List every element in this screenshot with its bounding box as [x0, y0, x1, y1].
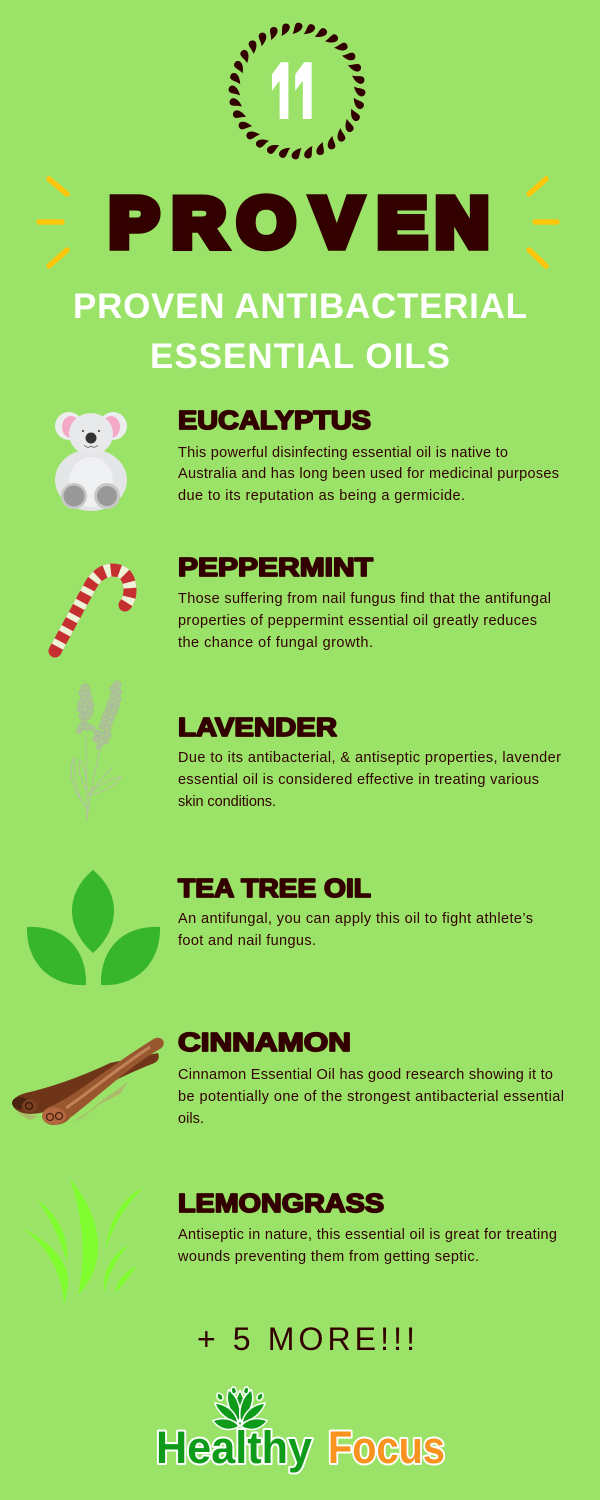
logo wordmark: Healthy [156, 1422, 312, 1473]
description: essential oil is considered effective in treating various [178, 772, 539, 788]
heading: TEA TREE OIL [178, 873, 371, 903]
description: foot and nail fungus. [178, 933, 316, 949]
drop ring [229, 23, 365, 159]
right flower spike [93, 681, 122, 750]
description: skin conditions. [178, 794, 276, 810]
stems and leaves [71, 736, 121, 820]
item: cinnamon [12, 1027, 564, 1127]
heading: LEMONGRASS [178, 1188, 384, 1218]
description: Australia and has long been used for medicinal purposes [178, 466, 559, 482]
logo wordmark [156, 1422, 445, 1473]
description: This powerful disinfecting essential oil is native to [178, 445, 508, 461]
icon: cinnamon sticks [12, 1038, 164, 1125]
subtitle: ESSENTIAL OILS [150, 337, 450, 376]
subtitle: PROVEN ANTIBACTERIAL [73, 287, 527, 326]
heading: PEPPERMINT [178, 552, 373, 582]
item: tea tree oil [27, 870, 533, 985]
badge: number 11 in drop ring [229, 23, 365, 159]
description: the chance of fungal growth. [178, 635, 373, 651]
description [177, 1227, 557, 1265]
left flower spike [76, 684, 94, 734]
icon: candy cane [55, 570, 130, 651]
description [178, 591, 551, 651]
item: eucalyptus [55, 405, 559, 511]
description [178, 445, 559, 504]
description [178, 1067, 564, 1127]
heading: LAVENDER [178, 712, 337, 742]
heading: CINNAMON [178, 1027, 351, 1057]
logo tree [214, 1388, 266, 1429]
callout: + 5 more: + 5 MORE!!! [197, 1321, 415, 1357]
icon: lavender sprig [71, 681, 122, 820]
logo: Healthy Focus [156, 1388, 445, 1473]
logo wordmark: Focus [328, 1422, 445, 1473]
icon: three green leaves [27, 870, 160, 985]
item: peppermint [55, 552, 551, 651]
subtitle [73, 287, 527, 376]
heading: EUCALYPTUS [178, 405, 371, 435]
description [178, 911, 533, 949]
description: be potentially one of the strongest antibacterial essential [178, 1089, 564, 1105]
badge: number 11 in drop ring: 11 [270, 44, 319, 153]
description: Antiseptic in nature, this essential oil is great for treating [178, 1227, 557, 1243]
description: Due to its antibacterial, & antiseptic properties, lavender [178, 750, 561, 766]
description: An antifungal, you can apply this oil to fight athlete’s [178, 911, 533, 927]
description: wounds preventing them from getting septic. [177, 1249, 479, 1265]
sparkle rays [39, 179, 557, 266]
description: Cinnamon Essential Oil has good research showing it to [178, 1067, 553, 1083]
description: oils. [178, 1111, 204, 1127]
item: lemongrass [22, 1179, 557, 1305]
icon: koala [55, 412, 127, 511]
title: PROVEN: PROVEN [109, 185, 489, 262]
description: due to its reputation as being a germicide. [178, 488, 465, 504]
item: lavender [71, 681, 561, 820]
description: Those suffering from nail fungus find that the antifungal [178, 591, 551, 607]
description: properties of peppermint essential oil greatly reduces [178, 613, 537, 629]
description [178, 750, 561, 810]
icon: grass blades [22, 1179, 143, 1305]
